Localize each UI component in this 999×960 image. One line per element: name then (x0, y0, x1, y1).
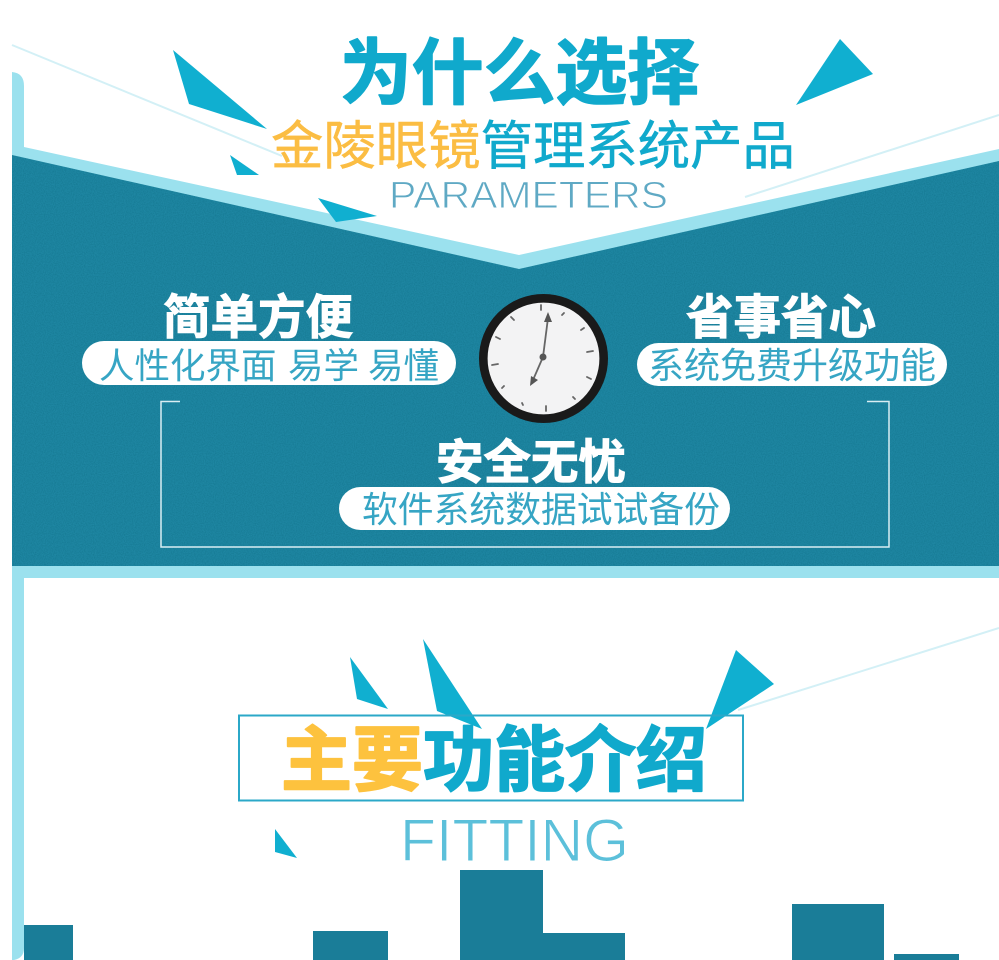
feature: easy to use: 易懂 (368, 346, 439, 386)
feature: easy to use (82, 292, 456, 386)
feature: easy to use: 易学 (288, 346, 359, 386)
label: PARAMETERS: PARAMETERS (389, 175, 668, 217)
bracket frame (161, 402, 889, 547)
panel: teal parameters band (12, 144, 999, 578)
feature: worry free security: 软件系统数据试试备份 (362, 490, 720, 530)
feature: hassle free (637, 292, 947, 386)
decorative triangles: top left (173, 50, 377, 222)
icon: clock (483, 298, 604, 419)
decorative triangles: section two (275, 639, 774, 858)
label: FITTING: FITTING (400, 807, 629, 874)
feature: hassle free: 系统免费升级功能 (648, 345, 936, 386)
title: why choose: 为什么选择 (340, 34, 699, 114)
feature: easy to use: 人性化界面 (99, 346, 277, 386)
feature: worry free security: 安全无忧 (436, 437, 626, 490)
feature: easy to use: 简单方便 (163, 292, 353, 345)
feature: hassle free: 省事省心 (686, 292, 876, 345)
heading box: main features: 主要功能介绍 (281, 722, 707, 801)
decorative triangle: top right (796, 39, 873, 105)
subtitle: product name: 金陵眼镜管理系统产品 (271, 118, 795, 176)
bottom teal blocks (24, 870, 959, 960)
feature: worry free security (339, 437, 730, 530)
left border strip (12, 72, 24, 960)
